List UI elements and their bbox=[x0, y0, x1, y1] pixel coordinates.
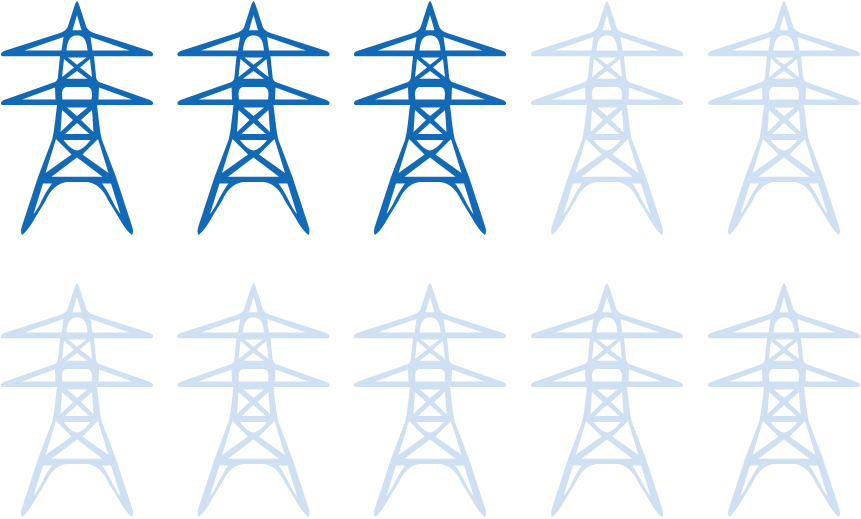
tower 2 (highlighted) bbox=[177, 1, 330, 235]
tower 8 (faded) bbox=[354, 283, 506, 517]
tower 9 (faded) bbox=[531, 283, 683, 517]
tower 4 (faded) bbox=[531, 1, 683, 235]
tower 7 (faded) bbox=[177, 283, 330, 517]
tower 1 (highlighted) bbox=[1, 1, 153, 235]
tower 5 (faded) bbox=[708, 1, 860, 235]
tower 10 (faded) bbox=[708, 283, 860, 517]
tower 3 (highlighted) bbox=[354, 1, 506, 235]
tower 6 (faded) bbox=[1, 283, 153, 517]
